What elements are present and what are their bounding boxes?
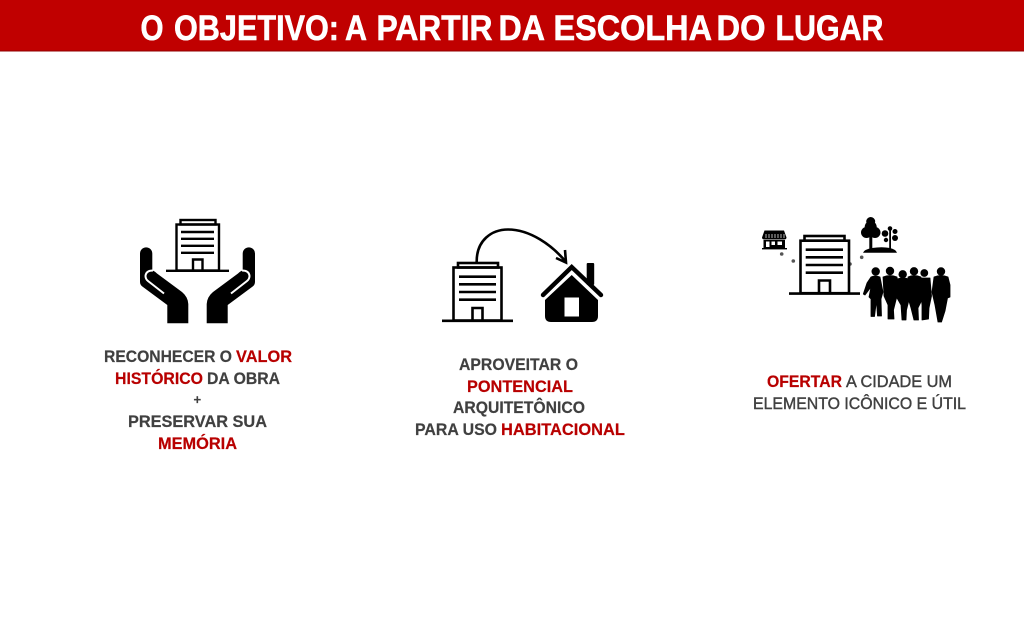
icon: building to house with arrow (442, 230, 601, 322)
title: A (345, 9, 367, 48)
text block: ofertar a cidade: A CIDADE UM (846, 373, 952, 391)
text block: reconhecer o valor: VALOR (236, 348, 292, 366)
title: ESCOLHA (554, 9, 712, 48)
icon: hands holding building (140, 220, 255, 323)
title: O (140, 9, 164, 48)
title: DA (498, 9, 545, 48)
text block: aproveitar o potencial: HABITACIONAL (501, 421, 625, 439)
title: DO (716, 9, 766, 48)
title (140, 9, 884, 48)
text block: reconhecer o valor: + (194, 392, 202, 407)
text block: aproveitar o potencial (415, 356, 625, 439)
text block: reconhecer o valor: HISTÓRICO (115, 369, 203, 388)
text block: reconhecer o valor (104, 348, 292, 453)
text block: reconhecer o valor: MEMÓRIA (158, 434, 237, 453)
text block: aproveitar o potencial: PARA USO (415, 421, 497, 439)
icon: trees (861, 217, 898, 253)
text block: aproveitar o potencial: PONTENCIAL (467, 378, 573, 396)
text block: aproveitar o potencial: APROVEITAR O (459, 356, 578, 374)
text block: reconhecer o valor: RECONHECER O (104, 348, 232, 366)
title banner (0, 0, 1024, 52)
icon: house (543, 263, 601, 322)
text block: aproveitar o potencial: ARQUITETÔNICO (453, 398, 585, 417)
text block: reconhecer o valor: PRESERVAR SUA (128, 413, 267, 431)
title: LUGAR (776, 9, 884, 48)
title: OBJETIVO: (174, 9, 339, 48)
icon: city elements and people (762, 217, 950, 322)
icon: people silhouettes (863, 267, 950, 322)
text block: ofertar a cidade (753, 373, 966, 413)
icon: shop (762, 230, 787, 249)
arrow (477, 230, 566, 263)
dots (780, 252, 864, 266)
icon: building (789, 236, 860, 294)
title: PARTIR (376, 9, 492, 48)
text block: reconhecer o valor: DA OBRA (207, 370, 280, 388)
text block: ofertar a cidade: ELEMENTO ICÔNICO E ÚTIL (753, 394, 966, 413)
text block: ofertar a cidade: OFERTAR (767, 373, 842, 391)
